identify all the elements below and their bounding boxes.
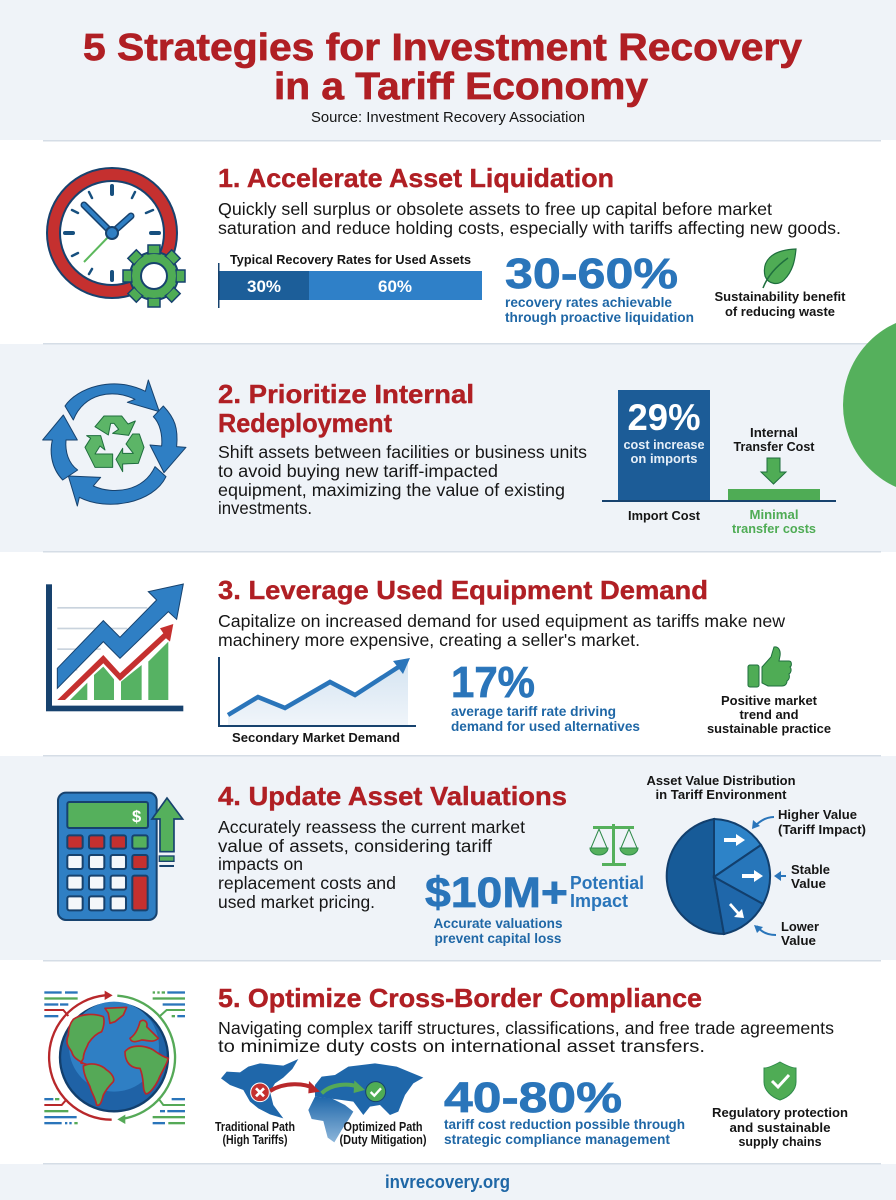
world map with trade paths: Traditional Path (215, 1119, 295, 1134)
description: used market pricing. (218, 892, 375, 912)
description: Quickly sell surplus or obsolete assets to free up capital before market (218, 199, 772, 219)
stat: 30-60%: through proactive liquidation (505, 310, 694, 325)
description: replacement costs and (218, 873, 396, 893)
panel: strategy 3 (0, 551, 896, 756)
line chart: secondary market demand (218, 657, 416, 745)
icon: clock with gear (46, 167, 185, 307)
market trend note: trend and (740, 707, 799, 722)
sustainability note (714, 289, 846, 319)
stat: $10M+: Accurate valuations (434, 916, 562, 931)
description: investments. (218, 498, 312, 518)
source line: Source: Investment Recovery Association (311, 110, 585, 126)
stat: $10M+ (425, 869, 644, 946)
description: machinery more expensive, creating a seller's market. (218, 630, 640, 650)
cost comparison chart: Import Cost (628, 508, 701, 523)
stat: 17%: demand for used alternatives (451, 719, 640, 734)
cost comparison chart: Transfer Cost (734, 439, 815, 454)
description (218, 199, 841, 238)
cost comparison chart: transfer costs (732, 521, 816, 536)
icon: calculator with up arrow (58, 793, 183, 920)
icon: globe with routes (44, 991, 185, 1124)
stat: $10M+: Impact (570, 891, 628, 911)
panel: strategy 2 (0, 343, 896, 552)
pie labels: Lower (781, 919, 819, 934)
cost comparison chart: cost increase (624, 437, 704, 452)
stat: $10M+: $10M+ (425, 869, 568, 917)
pie chart: asset value distribution (646, 773, 866, 948)
bar chart: recovery rates: 60% (378, 277, 412, 296)
title: in a Tariff Economy (274, 66, 648, 108)
icon: growth chart (46, 584, 183, 711)
description: Capitalize on increased demand for used equipment as tariffs make new (218, 611, 785, 631)
pie labels (752, 807, 866, 948)
description: saturation and reduce holding costs, especially with tariffs affecting new goods. (218, 218, 841, 238)
pie labels: (Tariff Impact) (778, 822, 866, 837)
description: Shift assets between facilities or business units (218, 442, 587, 462)
market trend note (707, 693, 831, 736)
bar chart: recovery rates (218, 252, 482, 308)
heading: Redeployment (218, 408, 392, 438)
bar chart: recovery rates: 30% (247, 277, 281, 296)
heading (218, 379, 474, 438)
regulatory note: and sustainable (730, 1120, 830, 1135)
panel: strategy 4 (0, 755, 896, 960)
world map with trade paths: Optimized Path (344, 1119, 423, 1134)
heading: 5. Optimize Cross-Border Compliance (218, 983, 702, 1013)
line chart: secondary market demand: Secondary Market Demand (232, 730, 400, 745)
bar chart: recovery rates: Typical Recovery Rates for Used Assets (230, 252, 471, 267)
market trend note: sustainable practice (707, 721, 831, 736)
description: Navigating complex tariff structures, classifications, and free trade agreements (218, 1018, 834, 1038)
sustainability note: Sustainability benefit (714, 289, 846, 304)
description: impacts on (218, 854, 303, 874)
website link text: invrecovery.org (385, 1172, 510, 1192)
stat: 40-80% (444, 1074, 685, 1147)
regulatory note: Regulatory protection (712, 1105, 848, 1120)
sustainability note: of reducing waste (725, 304, 835, 319)
icon: phone and thumbs up (748, 647, 791, 687)
cost comparison chart: on imports (630, 451, 698, 466)
description: Accurately reassess the current market (218, 817, 525, 837)
description: equipment, maximizing the value of existing (218, 480, 565, 500)
description: to minimize duty costs on international asset transfers. (218, 1036, 705, 1056)
regulatory note (712, 1105, 848, 1149)
pie labels: Stable (791, 862, 830, 877)
stat: 17%: 17% (451, 658, 535, 707)
footer (0, 1163, 896, 1200)
icon: balance scale (590, 824, 638, 866)
header panel (0, 0, 896, 140)
description (218, 1018, 834, 1056)
pie labels: Value (791, 876, 826, 891)
description: to avoid buying new tariff-impacted (218, 461, 498, 481)
stat: 30-60%: recovery rates achievable (505, 295, 672, 310)
heading: 3. Leverage Used Equipment Demand (218, 575, 708, 605)
heading: 4. Update Asset Valuations (218, 781, 567, 811)
title (83, 27, 802, 108)
stat: 40-80%: tariff cost reduction possible through (444, 1117, 685, 1132)
stat: 17% (451, 658, 640, 734)
decorative green circle (843, 315, 896, 495)
world map with trade paths: (Duty Mitigation) (340, 1132, 426, 1147)
icon: calculator with up arrow: $ (132, 807, 142, 826)
cost comparison chart (602, 390, 836, 536)
stat: 30-60% (505, 250, 694, 325)
description (218, 442, 587, 518)
stat: 40-80%: 40-80% (444, 1074, 622, 1122)
icon: leaf (763, 249, 796, 288)
market trend note: Positive market (721, 693, 818, 708)
cost comparison chart: Minimal (750, 507, 798, 522)
title: 5 Strategies for Investment Recovery (83, 27, 802, 69)
description (218, 611, 785, 650)
icon: shield (764, 1062, 796, 1100)
world map with trade paths (215, 1059, 426, 1147)
icon: down arrow (761, 458, 786, 484)
stat: 40-80%: strategic compliance management (444, 1132, 671, 1147)
pie chart: asset value distribution: in Tariff Environment (656, 787, 787, 802)
heading: 2. Prioritize Internal (218, 379, 474, 409)
pie labels: Higher Value (778, 807, 857, 822)
panel: strategy 5 (0, 960, 896, 1164)
description: value of assets, considering tariff (218, 836, 492, 856)
regulatory note: supply chains (738, 1134, 822, 1149)
pie chart: asset value distribution: Asset Value Distribution (646, 773, 796, 788)
cost comparison chart: 29% (628, 397, 700, 438)
cost comparison chart: Internal (750, 425, 798, 440)
stat: 30-60%: 30-60% (505, 250, 678, 298)
description (218, 817, 525, 912)
panel: strategy 1 (0, 140, 896, 344)
stat: $10M+: prevent capital loss (434, 931, 562, 946)
stat: 17%: average tariff rate driving (451, 704, 616, 719)
stat: $10M+: Potential (570, 873, 644, 893)
icon: recycling arrows (43, 380, 186, 506)
heading: 1. Accelerate Asset Liquidation (218, 163, 614, 193)
pie labels: Value (781, 933, 816, 948)
world map with trade paths: (High Tariffs) (222, 1132, 288, 1147)
